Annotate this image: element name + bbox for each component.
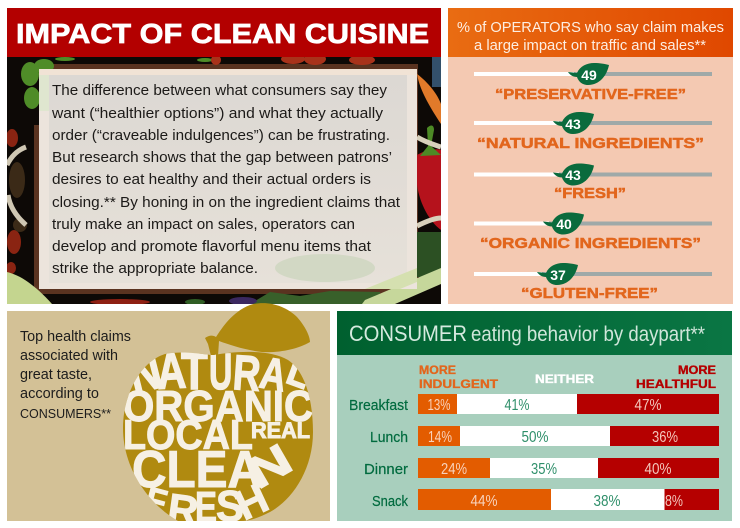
intro text: desires to eat healthy and their actual orders is	[52, 171, 371, 188]
operators heading: % of OPERATORS who say claim makes	[457, 19, 724, 36]
panel: operators claims	[448, 8, 733, 304]
intro text: But research shows that the gap between patrons’	[52, 149, 392, 166]
row: lunch: 14%	[428, 429, 452, 446]
icon: apple word cloud: H	[228, 474, 275, 528]
title banner	[7, 8, 441, 57]
claim: preservative-free 49	[474, 63, 712, 103]
claim: gluten-free 37	[474, 263, 712, 302]
intro text: develop and promote flavorful menu items that	[52, 238, 372, 255]
row: breakfast: 13%	[428, 397, 450, 414]
row: snack: 8%	[665, 493, 683, 510]
icon: apple word cloud: T	[181, 342, 208, 401]
icon: apple word cloud: F	[141, 480, 171, 522]
claim: preservative-free 49: 49	[581, 67, 597, 83]
legend: MORE	[419, 363, 456, 377]
claim: natural ingredients 43: 43	[565, 116, 581, 132]
legend: INDULGENT	[419, 377, 499, 391]
icon: apple word cloud: REAL	[251, 418, 310, 443]
icon: lettuce	[7, 272, 52, 304]
icon: apple word cloud: L	[281, 348, 317, 399]
claim: organic ingredients 40: “ORGANIC INGREDIENTS”	[480, 236, 701, 252]
claim: natural ingredients 43: “NATURAL INGREDIENTS”	[477, 136, 704, 152]
row: lunch: 50%	[522, 429, 548, 446]
operators heading	[448, 8, 733, 57]
icon: apple word cloud: A	[156, 341, 187, 400]
icon: apple word cloud: LOCAL	[123, 411, 253, 458]
icon: apple word cloud: A	[256, 347, 291, 401]
icon: apple word cloud: N	[123, 341, 168, 406]
intro text: closing.** By honing in on the ingredient claims that	[52, 194, 401, 211]
icon: apple word cloud: N	[238, 434, 301, 499]
translucent text box	[39, 69, 417, 289]
health claims caption: Top health claims	[20, 328, 131, 345]
icon: apple word cloud: R	[231, 345, 262, 402]
panel: consumer eating behavior	[337, 311, 732, 521]
claim: fresh 43	[474, 164, 712, 202]
claim: organic ingredients 40	[474, 212, 712, 252]
claim: preservative-free 49: “PRESERVATIVE-FREE”	[495, 87, 686, 103]
icon: celery	[362, 268, 441, 304]
claim: organic ingredients 40: 40	[556, 216, 572, 232]
icon: apple word cloud: CLEA	[132, 441, 262, 499]
row: dinner	[364, 458, 719, 478]
legend	[419, 363, 716, 391]
row: snack: Snack	[372, 493, 408, 510]
row: breakfast: 41%	[504, 397, 530, 414]
icon: apple word cloud: ORGANIC	[123, 382, 313, 431]
intro text	[51, 82, 401, 277]
claim: gluten-free 37: “GLUTEN-FREE”	[521, 286, 658, 302]
row: lunch: Lunch	[370, 429, 408, 446]
background photo of vegetables	[6, 53, 441, 305]
consumer heading: eating behavior by daypart**	[471, 323, 705, 346]
icon: carrot	[417, 74, 441, 124]
intro text: order (“craveable indulgences”) can be frustrating.	[52, 127, 390, 144]
intro text: strike the appropriate balance.	[52, 260, 258, 277]
icon: apple word cloud: U	[209, 344, 232, 401]
icon: apple word cloud	[123, 303, 317, 528]
claim: gluten-free 37: 37	[550, 267, 566, 283]
row: dinner: 35%	[531, 461, 557, 478]
panel: health claims apple	[7, 303, 330, 528]
legend: NEITHER	[535, 372, 594, 386]
intro text: want (“healthier options”) and what they actually	[51, 105, 384, 122]
icon: rope left	[7, 147, 26, 225]
consumer heading	[337, 311, 732, 355]
row: snack: 38%	[594, 493, 620, 510]
health claims caption: according to	[20, 385, 99, 402]
health claims caption: CONSUMERS**	[20, 407, 111, 421]
health claims caption: associated with	[20, 347, 118, 364]
legend: MORE	[678, 363, 716, 377]
health claims caption: great taste,	[20, 366, 92, 383]
row: breakfast: 47%	[634, 397, 662, 414]
row: dinner: 24%	[441, 461, 467, 478]
row: dinner: Dinner	[364, 461, 408, 478]
title banner: IMPACT OF CLEAN CUISINE	[16, 18, 429, 49]
legend: HEALTHFUL	[636, 377, 716, 391]
row: dinner: 40%	[644, 461, 672, 478]
row: lunch: 36%	[652, 429, 678, 446]
claim: natural ingredients 43	[474, 112, 712, 152]
claim: fresh 43: “FRESH”	[554, 186, 626, 202]
consumer heading: CONSUMER	[349, 321, 467, 346]
claim: fresh 43: 43	[565, 167, 581, 183]
panel: impact of clean cuisine	[6, 8, 441, 305]
row: breakfast: Breakfast	[349, 397, 409, 414]
intro text: truly make an impact on sales, operators can	[52, 216, 355, 233]
operators heading: a large impact on traffic and sales**	[474, 37, 706, 54]
row: breakfast	[349, 394, 719, 414]
intro text: The difference between what consumers say they	[52, 82, 388, 99]
row: lunch	[370, 426, 719, 446]
row: snack	[372, 489, 719, 510]
icon: red pepper	[417, 126, 441, 230]
health claims caption	[20, 328, 131, 421]
row: snack: 44%	[470, 493, 498, 510]
